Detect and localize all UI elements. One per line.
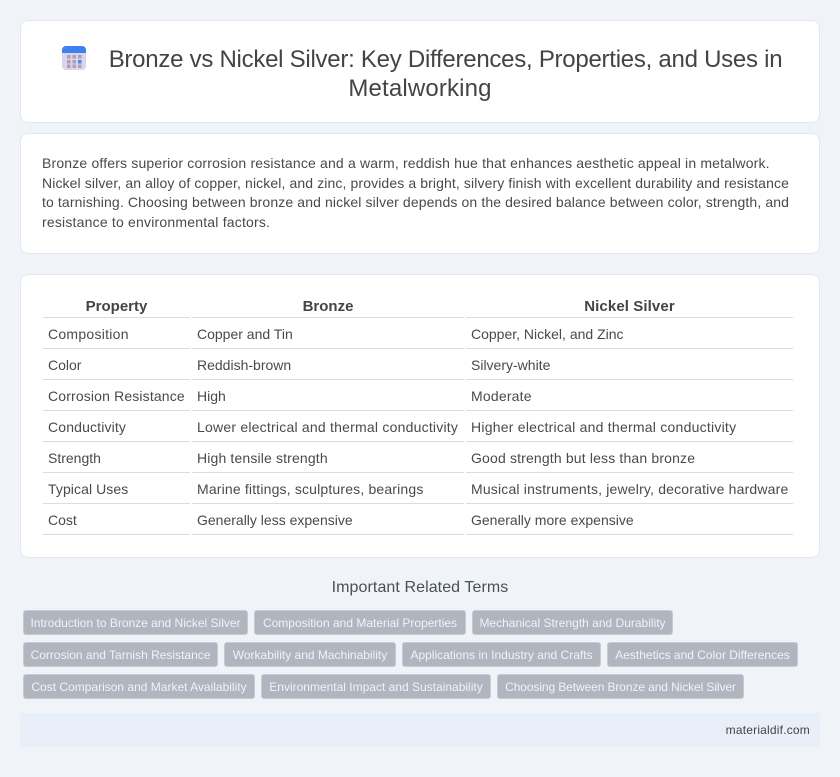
- tag: Corrosion and Tarnish Resistance: [31, 648, 210, 662]
- row: cost: Generally less expensive: [197, 512, 353, 528]
- tag: Applications in Industry and Crafts: [410, 648, 593, 662]
- text block: introduction: [42, 155, 789, 230]
- row: corrosion resistance: Moderate: [471, 388, 532, 404]
- panel: comparison table card: [20, 274, 820, 558]
- title: Bronze vs Nickel Silver: Key Differences, Properties, and Uses in: [109, 46, 782, 73]
- row: corrosion resistance: [48, 388, 532, 404]
- row: strength: Strength: [48, 450, 101, 466]
- tag: [23, 610, 248, 635]
- title: Metalworking: [348, 75, 492, 102]
- tag: [23, 642, 218, 667]
- tag: Mechanical Strength and Durability: [479, 616, 666, 630]
- tag: Composition and Material Properties: [263, 616, 457, 630]
- row: strength: Good strength but less than bronze: [471, 450, 695, 466]
- row: cost: Cost: [48, 512, 77, 528]
- header row: Property: [86, 298, 147, 315]
- row: typical uses: Typical Uses: [48, 481, 128, 497]
- tag: [402, 642, 601, 667]
- row: composition: Copper, Nickel, and Zinc: [471, 326, 624, 342]
- comparison table: [43, 298, 793, 535]
- row: composition: Copper and Tin: [197, 326, 293, 342]
- row: typical uses: Marine fittings, sculptures, bearings: [197, 481, 424, 497]
- tag: Aesthetics and Color Differences: [615, 648, 790, 662]
- heading: important related terms: Important Related Terms: [332, 579, 508, 596]
- row: conductivity: Conductivity: [48, 419, 126, 435]
- row: typical uses: [48, 481, 788, 497]
- tag: [607, 642, 798, 667]
- tag: [497, 674, 744, 699]
- tag: Environmental Impact and Sustainability: [269, 680, 483, 694]
- header row: [86, 298, 675, 315]
- panel: introduction card: [20, 133, 820, 254]
- text block: introduction: to tarnishing. Choosing between bronze and nickel silver depends on the desired balance between color, strength, and: [42, 194, 789, 210]
- tag: Choosing Between Bronze and Nickel Silver: [505, 680, 736, 694]
- row: color: Reddish-brown: [197, 357, 291, 373]
- tag: [254, 610, 466, 635]
- row: composition: Composition: [48, 326, 129, 342]
- text block: introduction: Nickel silver, an alloy of copper, nickel, and zinc, provides a bright, silvery finish with excellent durability and resistance: [42, 175, 789, 191]
- tag group: related terms: [23, 610, 798, 699]
- text block: introduction: Bronze offers superior corrosion resistance and a warm, reddish hue that enhances aesthetic appeal in metalwork.: [42, 155, 770, 171]
- tag: [472, 610, 673, 635]
- row: corrosion resistance: High: [197, 388, 226, 404]
- row: typical uses: Musical instruments, jewelry, decorative hardware: [471, 481, 788, 497]
- row: cost: Generally more expensive: [471, 512, 634, 528]
- row: corrosion resistance: Corrosion Resistance: [48, 388, 185, 404]
- row: conductivity: Higher electrical and thermal conductivity: [471, 419, 736, 435]
- header row: Nickel Silver: [584, 298, 675, 315]
- row: cost: [48, 512, 634, 528]
- footer source: materialdif.com: [726, 723, 810, 737]
- row: color: [48, 357, 550, 373]
- row: color: Color: [48, 357, 81, 373]
- footer bar: [20, 713, 820, 747]
- icon: calendar grid: [62, 46, 86, 70]
- tag: [224, 642, 396, 667]
- row: composition: [48, 326, 624, 342]
- title: [109, 46, 782, 102]
- tag: Cost Comparison and Market Availability: [31, 680, 247, 694]
- row: color: Silvery-white: [471, 357, 550, 373]
- row: conductivity: [48, 419, 736, 435]
- tag: Introduction to Bronze and Nickel Silver: [30, 616, 241, 630]
- tag: Workability and Machinability: [233, 648, 387, 662]
- text block: introduction: resistance to environmental factors.: [42, 214, 270, 230]
- row: strength: High tensile strength: [197, 450, 328, 466]
- tag: [261, 674, 491, 699]
- row: conductivity: Lower electrical and thermal conductivity: [197, 419, 458, 435]
- row: strength: [48, 450, 695, 466]
- panel: title card: [20, 20, 820, 123]
- tag: [23, 674, 255, 699]
- header row: Bronze: [303, 298, 353, 315]
